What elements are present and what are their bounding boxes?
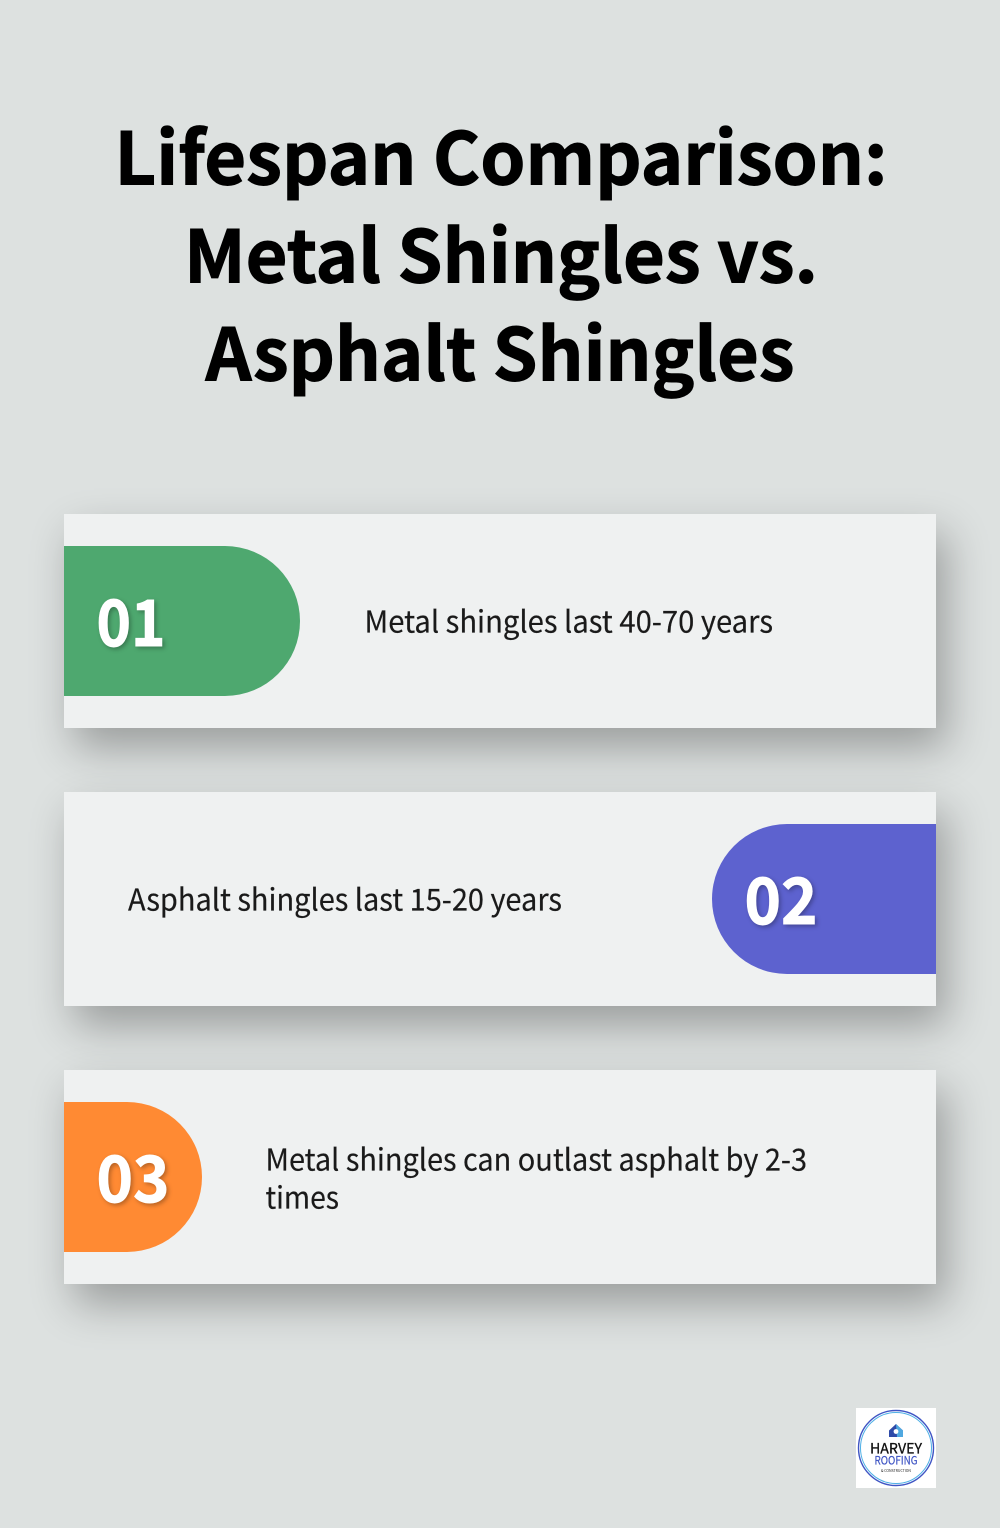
icon: house	[889, 1424, 903, 1437]
badge: 03	[64, 1102, 202, 1252]
text: outlast comparison: Metal shingles can outlast asphalt by 2-3	[266, 1136, 807, 1180]
logo: Harvey Roofing	[856, 1408, 936, 1488]
badge: 01: 01	[96, 573, 166, 665]
badge: 02: 02	[744, 851, 818, 943]
badge: 01	[64, 546, 300, 696]
title: Lifespan Comparison:	[114, 100, 888, 206]
text: outlast comparison	[266, 1136, 807, 1218]
title: Metal Shingles vs.	[184, 198, 818, 304]
text: asphalt lifespan: Asphalt shingles last 15-20 years	[128, 876, 562, 920]
panel: card 02	[64, 792, 936, 1006]
text: outlast comparison: times	[266, 1174, 339, 1218]
panel: card 01	[64, 514, 936, 728]
title	[114, 100, 888, 402]
logo: Harvey Roofing: & CONSTRUCTION	[881, 1469, 911, 1474]
text: metal lifespan: Metal shingles last 40-70 years	[364, 598, 773, 642]
logo: Harvey Roofing: HARVEY	[870, 1438, 922, 1458]
logo: Harvey Roofing: ROOFING	[874, 1452, 918, 1468]
badge: 03: 03	[96, 1129, 170, 1221]
title: Asphalt Shingles	[205, 296, 794, 402]
panel: card 03	[64, 1070, 936, 1284]
badge: 02	[712, 824, 936, 974]
